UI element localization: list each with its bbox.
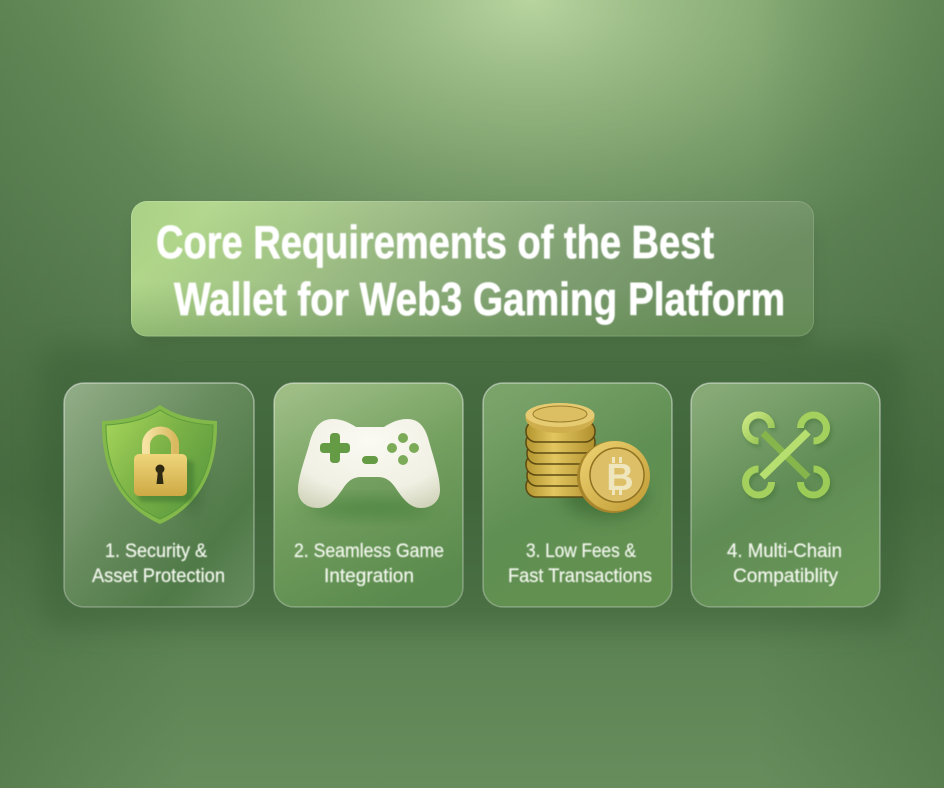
label: multi-chain: 4. Multi-Chain [727, 540, 842, 562]
label: fees: 3. Low Fees & [526, 540, 636, 562]
icon: shield with padlock [102, 405, 217, 524]
label: game integration: Integration [324, 565, 414, 587]
label: game integration [294, 540, 444, 587]
title panel [131, 201, 814, 346]
title heading: Wallet for Web3 Gaming Platform [174, 273, 785, 325]
icon: coin stack and bitcoin coin [526, 403, 650, 518]
label: security [92, 540, 225, 587]
title heading [156, 216, 785, 325]
bitcoin symbol: B [606, 457, 634, 499]
label: fees: Fast Transactions [508, 565, 652, 587]
panel: card 4 multi-chain [691, 383, 880, 607]
panel: card 3 fees [483, 383, 672, 607]
label: security: 1. Security & [105, 540, 207, 562]
title heading: Core Requirements of the Best [156, 216, 714, 268]
panel: card 1 security [64, 383, 254, 607]
icon: game controller [298, 419, 440, 517]
label: game integration: 2. Seamless Game [294, 540, 444, 562]
panel: card 2 game integration [274, 383, 463, 607]
label: fees [508, 540, 652, 587]
icon detail: d-pad [320, 433, 350, 463]
label: multi-chain: Compatiblity [733, 565, 838, 587]
label: security: Asset Protection [92, 565, 225, 587]
icon: crossed chain links [746, 415, 829, 498]
label: multi-chain [727, 540, 842, 587]
